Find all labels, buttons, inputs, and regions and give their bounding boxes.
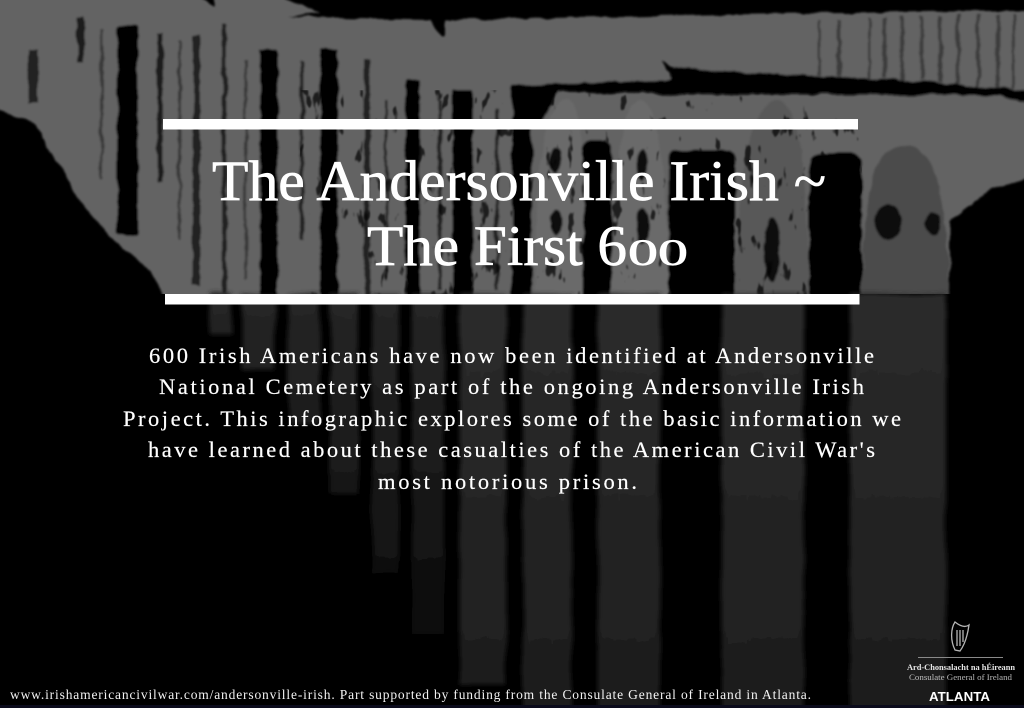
- intro paragraph: have learned about these casualties of the American Civil War's: [148, 437, 875, 462]
- logo divider: [918, 657, 1003, 658]
- black band between far and near rows: [641, 66, 1024, 102]
- intro paragraph: most notorious prison.: [378, 469, 637, 494]
- intro paragraph: [123, 343, 901, 494]
- icon: harp: [952, 622, 969, 651]
- far row of headstones: [445, 11, 1024, 92]
- lower part of headstones, dimmed by overlay: [210, 294, 946, 708]
- weathering spots on the stones: [100, 30, 941, 290]
- title: The Andersonville Irish ~: [212, 150, 826, 213]
- consulate logo: [907, 622, 1015, 704]
- title top rule: [163, 119, 858, 130]
- intro paragraph: Project. This infographic explores some of the basic information we: [123, 406, 901, 431]
- title: [212, 150, 826, 278]
- soft shading on arched stones: [858, 145, 950, 294]
- title: 00: [628, 233, 688, 274]
- title: The First 6: [367, 215, 627, 278]
- intro paragraph: 600 Irish Americans have now been identified at Andersonville: [149, 343, 874, 368]
- footer credit line: www.irishamericancivilwar.com/andersonville-irish. Part supported by funding from the Consulate General of Ireland in Atlanta.: [10, 687, 811, 702]
- dark gaps between stones: [28, 17, 862, 323]
- near row of headstones, upper part: [0, 0, 1024, 320]
- logo city: ATLANTA: [929, 690, 990, 704]
- title bottom rule: [165, 294, 860, 304]
- speckled weathering texture on near stones: [300, 90, 862, 300]
- bottom edge strip: [0, 705, 1024, 708]
- intro paragraph: National Cemetery as part of the ongoing Andersonville Irish: [159, 374, 864, 399]
- logo Irish name: Ard-Chonsalacht na hÉireann: [907, 662, 1015, 672]
- overlay right edge: [952, 294, 1024, 708]
- logo English name: Consulate General of Ireland: [909, 672, 1013, 682]
